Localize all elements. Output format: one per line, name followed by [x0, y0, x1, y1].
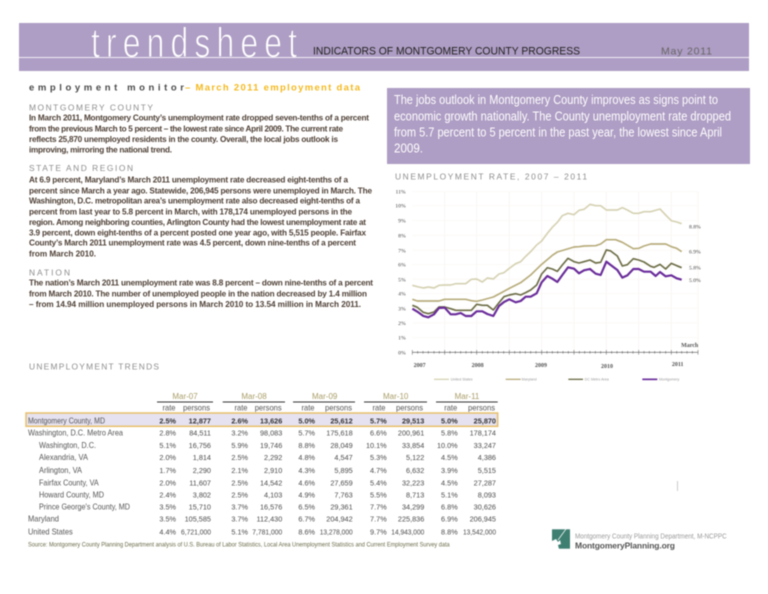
- text block: State and Region: region. Among neighboring counties, Arlington County had the lowest unemployment rate at: [29, 218, 366, 227]
- row: Maryland: 206,945: [470, 515, 496, 524]
- y axis labels: [395, 190, 406, 356]
- row: United States: [28, 528, 496, 537]
- year labels: 2010: [601, 364, 613, 370]
- table column headers: rate: [372, 404, 386, 413]
- row: Fairfax: Fairfax County, VA: [39, 478, 99, 487]
- row: Arlington: 4.7%: [370, 466, 387, 475]
- highlighted row: Montgomery County: 12,877: [189, 417, 211, 426]
- end value labels: 8.8%: [689, 225, 701, 231]
- row: United States: 7,781,000: [252, 528, 282, 537]
- row: Maryland: 204,942: [326, 515, 353, 524]
- row: Washington, D.C.: 19,746: [260, 441, 282, 450]
- text block: State and Region: percent from last year to 5.8 percent in March, with 178,174 unemployed persons in the: [29, 207, 352, 216]
- text block: Montgomery County: MONTGOMERY COUNTY: [29, 102, 153, 112]
- row: Howard: 7,763: [334, 490, 353, 499]
- row: Washington D.C. Metro Area: 6.6%: [370, 429, 387, 438]
- row: Fairfax: [39, 478, 496, 487]
- table column headers: rate: [444, 404, 458, 413]
- text block: State and Region: 3.9 percent, down eight-tenths of a percent posted one year ago, with 5,515 people. Fairfax: [29, 228, 366, 237]
- chart legend: United States: [451, 378, 473, 382]
- row: Prince George's: [39, 503, 496, 512]
- row: Prince George's: 29,361: [330, 503, 353, 512]
- row: Washington D.C. Metro Area: 178,174: [470, 429, 496, 438]
- line chart: unemployment rate: [395, 190, 701, 382]
- end value labels: 5.8%: [689, 266, 701, 272]
- year labels: [414, 343, 699, 370]
- row: Arlington: Arlington, VA: [39, 466, 82, 475]
- row: Howard: 4,103: [264, 490, 282, 499]
- row: United States: 13,278,000: [320, 528, 353, 537]
- row: United States: United States: [28, 528, 73, 537]
- row: Prince George's: 3.5%: [159, 503, 177, 512]
- year labels: March: [681, 343, 699, 349]
- row: Maryland: 3.7%: [231, 515, 249, 524]
- series: Montgomery: [412, 262, 682, 317]
- row: Washington D.C. Metro Area: 5.7%: [298, 429, 316, 438]
- row: Howard: 5.5%: [370, 490, 387, 499]
- row: Prince George's: 16,576: [260, 503, 282, 512]
- callout: jobs outlook: economic growth nationally. The County unemployment rate dropped: [394, 109, 731, 123]
- chart legend: Maryland: [522, 378, 537, 382]
- end value labels: 6.9%: [689, 250, 701, 256]
- row: Prince George's: 34,299: [402, 503, 424, 512]
- row: Fairfax: 11,607: [189, 478, 211, 487]
- y axis labels: 8%: [398, 233, 406, 239]
- icon: planning department logo: [552, 529, 570, 549]
- row: United States: 4.4%: [159, 528, 177, 537]
- row: Arlington: 2.1%: [231, 466, 249, 475]
- row: Howard: 8,093: [478, 490, 496, 499]
- row: Arlington: [39, 466, 496, 475]
- row: Alexandria: [39, 453, 496, 462]
- row: Howard: Howard County, MD: [39, 490, 104, 499]
- row: Alexandria: 1,814: [193, 453, 211, 462]
- row: Maryland: 3.5%: [159, 515, 177, 524]
- row: Washington D.C. Metro Area: 2.8%: [159, 429, 177, 438]
- row: United States: 5.1%: [231, 528, 249, 537]
- header subtitle: INDICATORS OF MONTGOMERY COUNTY PROGRESS: [313, 46, 580, 58]
- text block: State and Region: At 6.9 percent, Maryland’s March 2011 unemployment rate decreased eight-tenths of a: [29, 175, 348, 184]
- row: Maryland: 7.7%: [370, 515, 387, 524]
- chart legend: [434, 378, 679, 382]
- text block: State and Region: from March 2010.: [29, 249, 96, 258]
- row: Washington, D.C.: Washington, D.C.: [39, 441, 96, 450]
- row: Washington, D.C.: 33,247: [474, 441, 496, 450]
- table heading: UNEMPLOYMENT TRENDS: [29, 361, 159, 371]
- series: United States: [412, 204, 682, 288]
- row: United States: 8.8%: [441, 528, 458, 537]
- x axis: [412, 350, 698, 355]
- row: Washington D.C. Metro Area: 98,083: [260, 429, 282, 438]
- row: United States: 6,721,000: [181, 528, 211, 537]
- row: United States: 14,943,000: [391, 528, 424, 537]
- row: Washington D.C. Metro Area: 175,618: [326, 429, 353, 438]
- row: Fairfax: 5.4%: [370, 478, 387, 487]
- highlighted row: Montgomery County: 25,870: [474, 417, 496, 426]
- text block: Nation: from March 2010. The number of unemployed people in the nation decreased by 1.4 million: [29, 290, 367, 299]
- row: Prince George's: 7.7%: [370, 503, 387, 512]
- row: United States: 13,542,000: [463, 528, 496, 537]
- row: Arlington: 5,895: [334, 466, 353, 475]
- callout: jobs outlook: [387, 88, 750, 164]
- row: Prince George's: 15,710: [189, 503, 211, 512]
- row: Maryland: 105,585: [185, 515, 211, 524]
- row: Alexandria: 4.8%: [298, 453, 316, 462]
- section heading: employment monitor: – March 2011 employment data: [185, 83, 361, 94]
- row: Washington, D.C.: 8.8%: [298, 441, 316, 450]
- table column headers: rate: [234, 404, 248, 413]
- callout: jobs outlook: The jobs outlook in Montgomery County improves as signs point to: [394, 93, 718, 107]
- row: Fairfax: 2.0%: [159, 478, 177, 487]
- row: Washington, D.C.: 10.1%: [366, 441, 387, 450]
- row: Washington, D.C.: 5.9%: [231, 441, 249, 450]
- callout: jobs outlook: from 5.7 percent to 5 percent in the past year, the lowest since April: [394, 126, 722, 140]
- table column headers: rate: [302, 404, 315, 413]
- title: trendsheet: trendsheet: [91, 19, 297, 66]
- row: Washington, D.C.: [39, 441, 496, 450]
- row: Fairfax: 32,223: [402, 478, 424, 487]
- chart heading: UNEMPLOYMENT RATE, 2007 – 2011: [395, 172, 587, 182]
- row: Alexandria: Alexandria, VA: [39, 453, 88, 462]
- text block: State and Region: percent since March a year ago. Statewide, 206,945 persons were unemployed in March. The: [29, 186, 372, 195]
- table column headers: rate: [162, 404, 176, 413]
- row: Maryland: 112,430: [256, 515, 282, 524]
- row: Prince George's: 6.5%: [298, 503, 316, 512]
- row: Prince George's: 3.7%: [231, 503, 249, 512]
- text block: Montgomery County: [29, 102, 369, 155]
- stray mark: [677, 481, 678, 491]
- row: Arlington: 2,910: [264, 466, 282, 475]
- row: Prince George's: 6.8%: [441, 503, 458, 512]
- section heading: employment monitor: employment monitor: [29, 83, 184, 94]
- y axis labels: 5%: [398, 277, 406, 283]
- row: Howard: 3,802: [193, 490, 211, 499]
- y axis labels: 9%: [398, 219, 406, 225]
- row: Howard: 2.4%: [159, 490, 177, 499]
- y axis labels: 4%: [398, 292, 406, 298]
- row: Arlington: 3.9%: [441, 466, 458, 475]
- y axis labels: 3%: [398, 306, 406, 312]
- row: Fairfax: 4.6%: [298, 478, 316, 487]
- highlighted row: Montgomery County: 2.5%: [159, 417, 177, 426]
- row: Washington, D.C.: 16,756: [189, 441, 211, 450]
- row: Arlington: 1.7%: [159, 466, 177, 475]
- row: Maryland: [28, 515, 496, 524]
- row: Alexandria: 5,122: [406, 453, 424, 462]
- series: Maryland: [412, 240, 682, 301]
- text block: State and Region: Washington, D.C. metropolitan area’s unemployment rate also decreased eight-tenths of a: [29, 197, 360, 206]
- table year headers: Mar-11: [455, 392, 480, 401]
- row: Washington D.C. Metro Area: Washington, D.C. Metro Area: [28, 429, 123, 438]
- row: United States: 9.7%: [370, 528, 387, 537]
- row: Maryland: Maryland: [28, 515, 59, 524]
- table column headers: [162, 404, 495, 413]
- row: Fairfax: 27,287: [474, 478, 496, 487]
- y axis labels: 0%: [398, 350, 406, 356]
- y axis labels: 11%: [395, 190, 406, 196]
- footer organisation text: MontgomeryPlanning.org: [575, 541, 675, 551]
- row: Alexandria: 4,547: [334, 453, 353, 462]
- row: Fairfax: 4.5%: [441, 478, 458, 487]
- highlighted row: Montgomery County: 2.6%: [231, 417, 249, 426]
- text block: State and Region: STATE AND REGION: [29, 163, 133, 173]
- highlighted row: Montgomery County: 5.7%: [370, 417, 387, 426]
- y axis labels: 7%: [398, 248, 406, 254]
- y axis labels: 6%: [398, 263, 406, 269]
- highlighted row: Montgomery County: [26, 413, 498, 426]
- table column headers: persons: [325, 404, 352, 413]
- highlighted row: Montgomery County: 13,626: [260, 417, 282, 426]
- row: Alexandria: 5.3%: [370, 453, 387, 462]
- text block: Nation: – from 14.94 million unemployed persons in March 2010 to 13.54 million in March 2011.: [29, 300, 361, 309]
- highlighted row: Montgomery County: 5.0%: [441, 417, 458, 426]
- table column headers: persons: [255, 404, 282, 413]
- row: Maryland: 6.7%: [298, 515, 316, 524]
- text block: Nation: [29, 267, 373, 309]
- source note: Source: Montgomery County Planning Department analysis of U.S. Bureau of Labor Statistics, Local Area Unemployment Statistics and Current Employment Survey data: [28, 542, 450, 548]
- year labels: 2009: [535, 363, 547, 369]
- row: Prince George's: 30,626: [474, 503, 496, 512]
- end value labels: [689, 225, 701, 284]
- row: Washington, D.C.: 33,854: [402, 441, 424, 450]
- row: Alexandria: 2,292: [264, 453, 282, 462]
- y axis labels: 1%: [398, 336, 406, 342]
- row: Alexandria: 2.0%: [159, 453, 177, 462]
- table: unemployment trends: [26, 392, 498, 537]
- chart legend: DC Metro Area: [585, 378, 610, 382]
- header date: May 2011: [661, 46, 712, 58]
- row: Fairfax: 14,542: [260, 478, 282, 487]
- row: Prince George's: Prince George's County, MD: [39, 503, 130, 512]
- text block: State and Region: County’s March 2011 unemployment rate was 4.5 percent, down nine-tenths of a percent: [29, 238, 356, 247]
- row: Washington D.C. Metro Area: 84,511: [189, 429, 211, 438]
- text block: Montgomery County: reflects 25,870 unemployed residents in the county. Overall, the local jobs outlook is: [29, 135, 338, 144]
- highlighted row: Montgomery County: 5.0%: [298, 417, 316, 426]
- table column headers: persons: [468, 404, 495, 413]
- row: Arlington: 5,515: [478, 466, 496, 475]
- row: Washington D.C. Metro Area: 5.8%: [441, 429, 458, 438]
- row: Washington D.C. Metro Area: [28, 429, 496, 438]
- row: Arlington: 2,290: [193, 466, 211, 475]
- series: DC Metro Area: [412, 250, 682, 314]
- year labels: 2007: [414, 363, 426, 369]
- row: Washington, D.C.: 28,049: [330, 441, 353, 450]
- text block: State and Region: [29, 163, 372, 258]
- y axis labels: 2%: [398, 321, 406, 327]
- table year headers: [172, 392, 480, 401]
- row: Fairfax: 2.5%: [231, 478, 249, 487]
- row: Washington, D.C.: 5.1%: [159, 441, 177, 450]
- row: Fairfax: 27,659: [330, 478, 353, 487]
- table year headers: Mar-10: [383, 392, 409, 401]
- row: Alexandria: 4,386: [478, 453, 496, 462]
- callout: jobs outlook: 2009.: [394, 142, 423, 156]
- end value labels: 5.0%: [689, 278, 701, 284]
- table year headers: Mar-09: [312, 392, 338, 401]
- year labels: 2008: [472, 363, 484, 369]
- text block: Montgomery County: In March 2011, Montgomery County’s unemployment rate dropped seven-tenths of a percent: [29, 114, 369, 122]
- row: Howard: [39, 490, 496, 499]
- table year headers: Mar-07: [172, 392, 198, 401]
- row: Howard: 4.9%: [298, 490, 316, 499]
- table column headers: persons: [396, 404, 423, 413]
- row: Arlington: 4.3%: [298, 466, 316, 475]
- row: Maryland: 225,836: [398, 515, 424, 524]
- row: Arlington: 6,632: [406, 466, 424, 475]
- footer organisation text: [575, 531, 727, 551]
- text block: Montgomery County: improving, mirroring the national trend.: [29, 146, 172, 155]
- text block: Nation: The nation’s March 2011 unemployment rate was 8.8 percent – down nine-tenths of a percent: [29, 279, 373, 288]
- row: Alexandria: 2.5%: [231, 453, 249, 462]
- footer organisation text: Montgomery County Planning Department, M-NCPPC: [575, 531, 727, 540]
- row: United States: 8.6%: [298, 528, 316, 537]
- row: Washington D.C. Metro Area: 3.2%: [231, 429, 249, 438]
- highlighted row: Montgomery County: 25,612: [330, 417, 353, 426]
- text block: Nation: NATION: [29, 267, 70, 277]
- section heading: employment monitor: [29, 83, 361, 94]
- highlighted row: Montgomery County: Montgomery County, MD: [28, 417, 105, 426]
- chart legend: Montgomery: [659, 378, 679, 382]
- highlighted row: Montgomery County: 29,513: [402, 417, 424, 426]
- y axis labels: 10%: [395, 204, 406, 210]
- row: Howard: 2.5%: [231, 490, 249, 499]
- header band: [19, 19, 749, 71]
- table column headers: persons: [183, 404, 210, 413]
- row: Maryland: 6.9%: [441, 515, 458, 524]
- row: Howard: 8,713: [406, 490, 424, 499]
- table year headers: Mar-08: [241, 392, 267, 401]
- row: Alexandria: 4.5%: [441, 453, 458, 462]
- row: Washington D.C. Metro Area: 200,961: [398, 429, 424, 438]
- year labels: 2011: [672, 362, 683, 368]
- row: Howard: 5.1%: [441, 490, 458, 499]
- row: Washington, D.C.: 10.0%: [437, 441, 458, 450]
- text block: Montgomery County: from the previous March to 5 percent – the lowest rate since April 2009. The current rate: [29, 124, 343, 134]
